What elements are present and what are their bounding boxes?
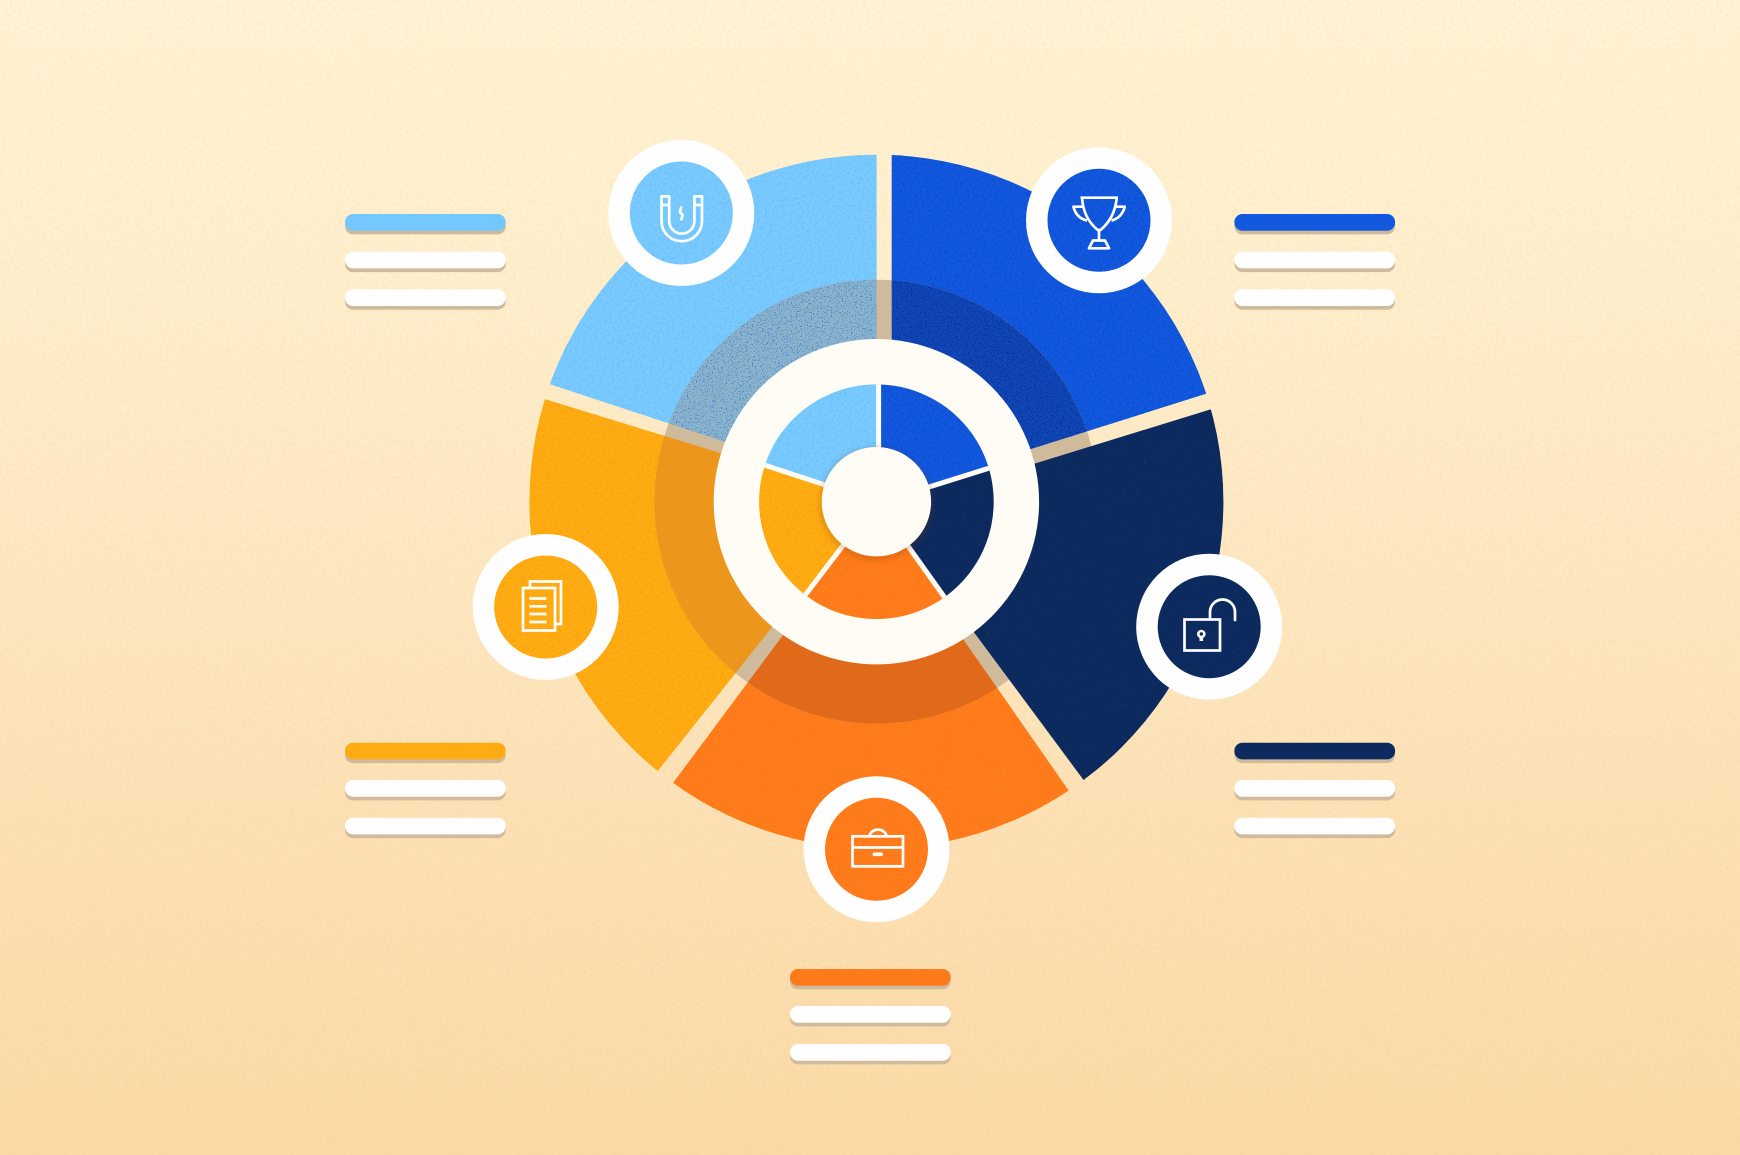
inner segment: orange [806,546,944,619]
icon: trophy [1074,198,1125,248]
segment: navy [974,409,1224,780]
inner segment: navy [910,468,994,598]
inner segment: blue [876,384,989,485]
segment: blue [892,155,1206,432]
inner donut chart [759,384,994,619]
legend: light blue [345,214,506,310]
segment: light blue [550,154,877,424]
icon: open padlock [1184,600,1235,650]
marker: briefcase [804,776,950,922]
marker: documents [473,534,619,680]
legend: navy [1234,743,1395,838]
inner segment: amber [759,465,842,595]
marker: magnet [608,140,754,286]
segment: orange [673,682,1069,841]
center hub [822,447,931,556]
legend: orange [790,969,951,1064]
icon: magnet [662,196,702,241]
segment: amber [529,399,736,771]
marker: open padlock [1136,554,1282,700]
white ring [714,339,1039,664]
legend: amber [345,743,506,838]
icon: briefcase [852,830,903,866]
marker: trophy [1026,147,1172,293]
icon: documents [523,582,561,630]
outer pie chart [400,100,1300,900]
shaded inner ring of the pie [654,280,1092,724]
legend: blue [1234,214,1395,310]
inner segment: light blue [765,384,876,482]
